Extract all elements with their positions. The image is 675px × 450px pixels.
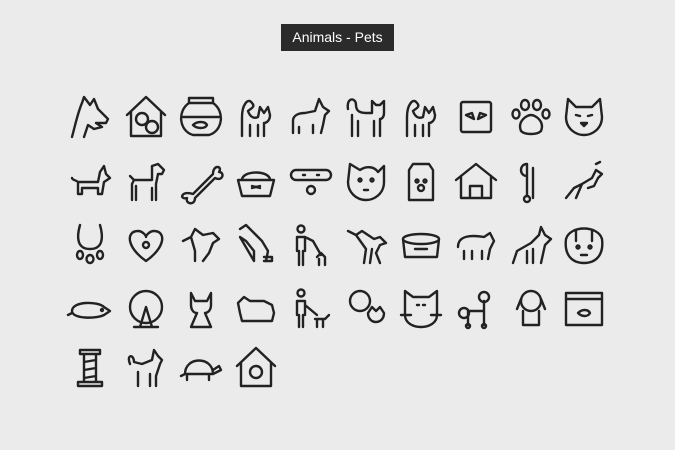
- icon: food bowl: [238, 172, 274, 196]
- icon: doghouse: [456, 164, 496, 198]
- icon: person with dog: [297, 290, 329, 327]
- icon: sitting cat: [191, 293, 211, 327]
- icon: aquarium: [566, 293, 602, 325]
- icon: wolf head: [72, 97, 108, 137]
- icon: turtle: [181, 360, 221, 380]
- icon: wolf: [513, 227, 551, 263]
- icon: bowl bone: [403, 234, 439, 257]
- icon: guinea pig: [566, 228, 602, 263]
- icon: cat face: [566, 99, 602, 135]
- icon: standing cat: [348, 99, 384, 136]
- icon: hamster wheel: [130, 291, 162, 327]
- icon: cat eyes box: [461, 102, 491, 132]
- icon: house with hamster: [237, 348, 275, 386]
- title: [281, 24, 394, 51]
- icon: puppy sitting: [517, 291, 545, 325]
- icon: collar: [291, 170, 331, 194]
- icon: poodle: [459, 292, 489, 328]
- icon: fluffy dog: [238, 297, 274, 321]
- icon: fishbowl: [181, 98, 221, 135]
- icon: shiba face: [348, 164, 384, 200]
- title: Animals - Pets: [292, 29, 383, 45]
- icon: bone: [182, 167, 222, 203]
- icon: scratching post: [78, 350, 102, 386]
- icon: man with dog: [297, 226, 325, 265]
- icon: husky: [129, 350, 162, 386]
- icon: pet house: [127, 97, 165, 136]
- icon: arched cat: [242, 101, 270, 136]
- icon: corgi: [72, 166, 110, 194]
- icon: paw print: [77, 225, 103, 263]
- icon: arched cat 2: [407, 101, 435, 136]
- icon: jumping dog: [566, 162, 602, 198]
- icon: dog walking: [348, 231, 386, 263]
- icon: leash: [521, 164, 533, 202]
- icon: dog standing: [130, 164, 164, 200]
- icon: dog sitting: [183, 229, 219, 261]
- icon: german shepherd: [293, 99, 329, 133]
- icon: food bag: [409, 164, 433, 200]
- icon: dog pooping: [240, 225, 272, 261]
- icon: pig / dog: [458, 233, 494, 259]
- icon: rat: [68, 303, 110, 318]
- icon: heart paw: [130, 231, 162, 261]
- icon: paw: [512, 100, 550, 134]
- icon: dog and cat faces: [350, 291, 384, 322]
- icon: cat face stripes: [401, 291, 441, 327]
